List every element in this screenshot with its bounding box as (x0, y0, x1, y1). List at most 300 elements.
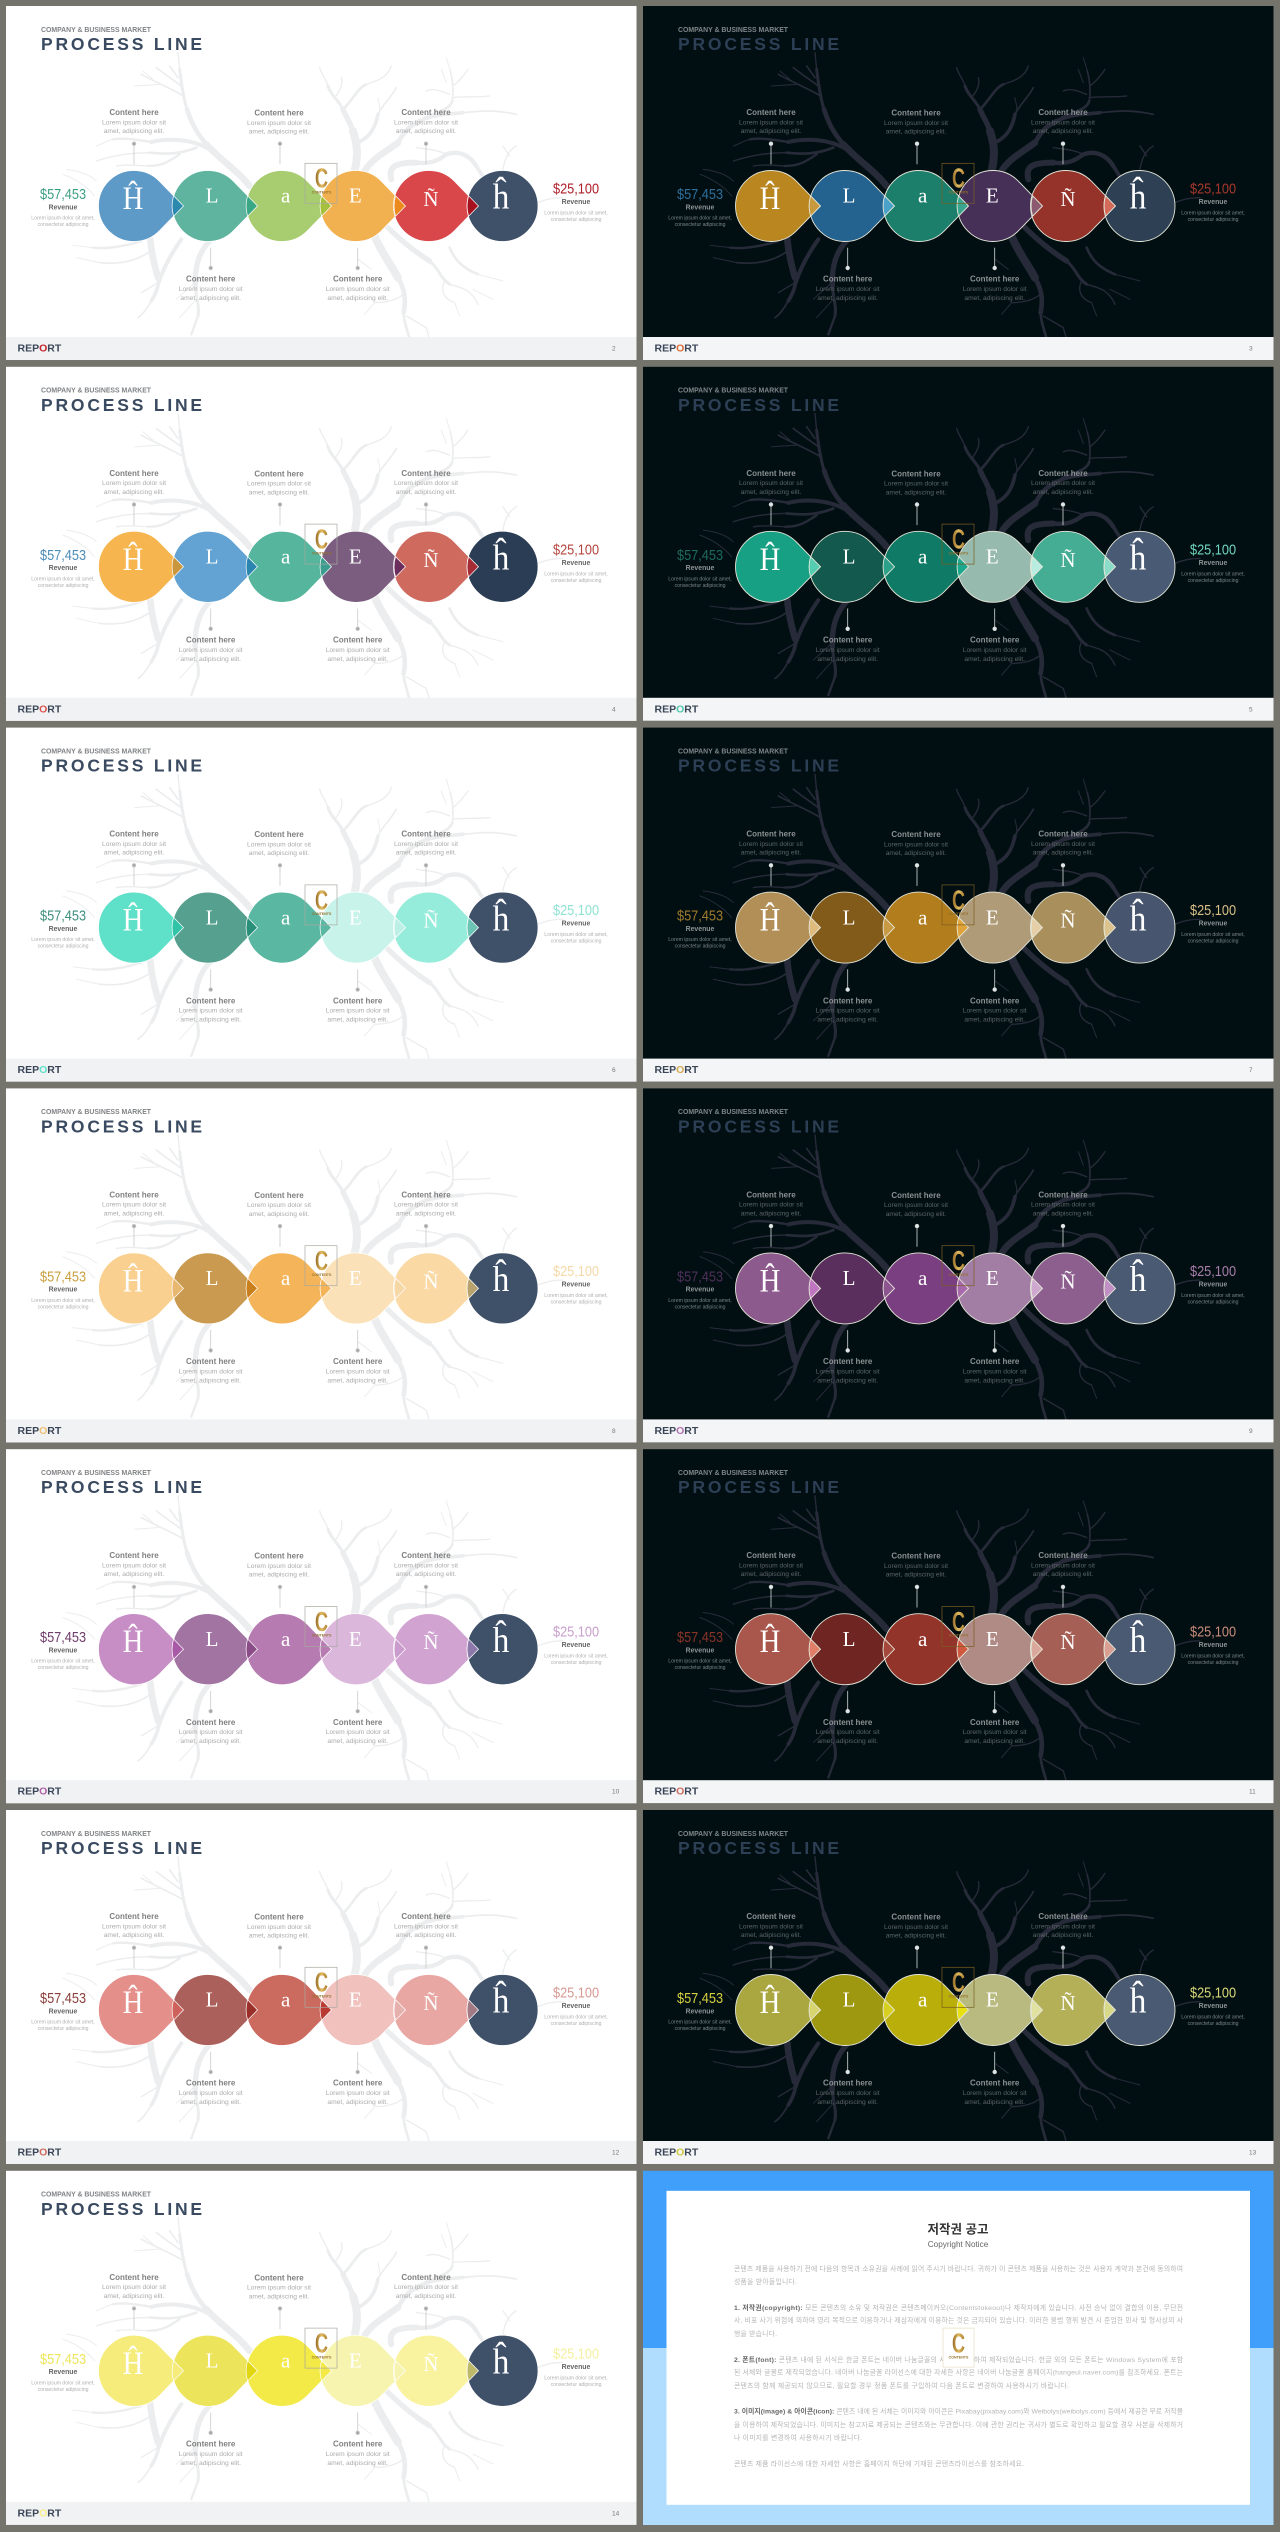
revenue left: Revenue (49, 926, 78, 933)
callout bottom 1: Content here (823, 2079, 873, 2088)
callout top 1: Content here (746, 108, 796, 117)
logo (943, 2328, 974, 2367)
revenue left: Lorem ipsum dolor sit amet, (31, 2020, 95, 2026)
heading: PROCESS LINE (678, 756, 842, 776)
tree illustration (700, 774, 1200, 1061)
callout top 1 (102, 1551, 166, 1608)
revenue left: consectetur adipiscing (675, 944, 726, 950)
chain letters: Ñ (423, 548, 439, 572)
callout top 2: Lorem ipsum dolor sit (247, 120, 311, 127)
revenue left (31, 1267, 95, 1310)
revenue left: $57,453 (40, 1267, 86, 1285)
logo: C (952, 1245, 965, 1276)
revenue right: consectetur adipiscing (551, 578, 602, 584)
logo: CONTENTS (312, 551, 332, 555)
callout top 1 (102, 2273, 166, 2329)
revenue left: $57,453 (40, 546, 86, 563)
chain letters (760, 1619, 1146, 1660)
callout top 2: Lorem ipsum dolor sit (884, 1202, 948, 1209)
footer bar (6, 698, 636, 721)
heading: PROCESS LINE (678, 1116, 842, 1136)
heading: PROCESS LINE (41, 34, 205, 54)
chain letters: L (843, 1627, 855, 1651)
chain letters: Ñ (423, 909, 439, 933)
callout top 2: amet, adipiscing elit. (249, 1932, 309, 1940)
revenue left: Revenue (686, 204, 715, 211)
chain letters: Ĥ (123, 901, 143, 938)
callout top 3: Content here (1038, 469, 1088, 478)
callout bottom 1: Lorem ipsum dolor sit (816, 2090, 880, 2097)
logo: C (315, 1606, 328, 1637)
callout top 1: Content here (109, 469, 159, 478)
revenue right (1181, 540, 1245, 584)
callout bottom 1: Content here (186, 275, 236, 284)
chain letters: L (206, 2349, 218, 2373)
revenue left: consectetur adipiscing (675, 2026, 726, 2032)
revenue left: Revenue (686, 2008, 715, 2015)
callout bottom 1 (179, 2412, 243, 2467)
callout top 3 (394, 1190, 458, 1247)
callout top 1 (102, 830, 166, 886)
callout top 3 (1031, 830, 1095, 886)
notice body text: 나 이미지를 변경하여 사용하시기 바랍니다. (734, 2433, 862, 2442)
callout top 3: Content here (401, 2273, 451, 2282)
chain letters: ĥ (1130, 536, 1146, 578)
tree illustration (700, 413, 1200, 700)
page number: 8 (612, 1428, 616, 1435)
page number: 4 (612, 706, 616, 713)
logo: C (952, 884, 965, 915)
process chain (735, 1614, 1175, 1685)
callout bottom 1: Lorem ipsum dolor sit (816, 1008, 880, 1015)
callout top 3: Lorem ipsum dolor sit (1031, 1202, 1095, 1209)
revenue right: consectetur adipiscing (1188, 217, 1239, 223)
revenue left: Lorem ipsum dolor sit amet, (668, 937, 732, 943)
process chain (98, 1974, 538, 2046)
slide 4: light process line (6, 367, 636, 721)
footer label: REPORT (18, 2146, 62, 2158)
revenue right: Revenue (1199, 1281, 1228, 1288)
callout top 3: Lorem ipsum dolor sit (1031, 1562, 1095, 1569)
heading: PROCESS LINE (41, 1477, 205, 1497)
revenue right: Lorem ipsum dolor sit amet, (544, 210, 608, 216)
callout bottom 2: amet, adipiscing elit. (327, 1017, 388, 1024)
revenue right: Revenue (562, 1642, 591, 1649)
revenue right: $25,100 (553, 540, 599, 558)
callout top 3: Lorem ipsum dolor sit (1031, 480, 1095, 487)
heading: COMPANY & BUSINESS MARKET (678, 1831, 789, 1838)
logo: C (315, 884, 328, 915)
callout bottom 1: amet, adipiscing elit. (817, 1738, 878, 1745)
callout top 3: amet, adipiscing elit. (1033, 489, 1093, 496)
revenue right: consectetur adipiscing (551, 1299, 602, 1305)
callout top 3: amet, adipiscing elit. (396, 850, 456, 857)
chain letters: L (206, 544, 218, 568)
chain letters: L (206, 1627, 218, 1651)
callout top 3: Content here (401, 1551, 451, 1560)
process chain (98, 531, 538, 602)
callout bottom 2: Lorem ipsum dolor sit (963, 2090, 1027, 2097)
footer bar (6, 1419, 636, 1442)
revenue right: consectetur adipiscing (551, 939, 602, 945)
revenue left (31, 546, 95, 589)
footer label: REPORT (654, 1786, 699, 1798)
heading: COMPANY & BUSINESS MARKET (678, 27, 789, 34)
footer bar (643, 698, 1274, 721)
logo (942, 884, 974, 925)
callout top 1: Content here (109, 830, 159, 839)
callout top 2 (247, 1552, 311, 1608)
slide 9: dark process line (643, 1088, 1274, 1442)
revenue right: Lorem ipsum dolor sit amet, (544, 2375, 608, 2381)
chain letters: Ñ (423, 2352, 439, 2376)
revenue right (544, 2344, 608, 2388)
chain letters: ĥ (493, 2340, 509, 2382)
callout bottom 1: Lorem ipsum dolor sit (179, 286, 243, 293)
revenue right: $25,100 (1190, 540, 1236, 558)
chain letters (760, 536, 1146, 578)
revenue right (544, 1983, 608, 2027)
callout top 2: Lorem ipsum dolor sit (247, 481, 311, 488)
logo: C (952, 523, 965, 554)
footer label: REPORT (654, 2146, 699, 2158)
revenue right: consectetur adipiscing (1188, 939, 1239, 945)
revenue right: Revenue (562, 2364, 591, 2371)
callout top 2 (884, 1912, 948, 1968)
revenue right: $25,100 (553, 901, 599, 918)
footer label: REPORT (654, 703, 699, 715)
slide 11: dark process line (643, 1449, 1274, 1803)
revenue left: consectetur adipiscing (38, 222, 89, 228)
callout top 1: Content here (109, 108, 159, 117)
revenue left (31, 1989, 95, 2032)
process chain (98, 1253, 538, 1324)
callout top 2: Content here (254, 1191, 304, 1200)
chain letters: Ñ (423, 1630, 439, 1654)
chain letters: L (843, 544, 855, 568)
callout bottom 2: Lorem ipsum dolor sit (326, 1368, 390, 1375)
revenue left: Revenue (686, 1647, 715, 1654)
callout bottom 2: Content here (333, 1357, 383, 1366)
chain letters: a (281, 544, 291, 568)
chain letters: a (281, 2349, 291, 2373)
callout bottom 1: Lorem ipsum dolor sit (816, 286, 880, 293)
revenue left: Lorem ipsum dolor sit amet, (668, 1298, 732, 1304)
callout top 3 (394, 469, 458, 525)
revenue left: $57,453 (40, 1989, 86, 2006)
slide 7: dark process line (643, 728, 1274, 1082)
callout top 1: Content here (746, 1551, 796, 1560)
callout top 2 (247, 469, 311, 525)
notice body text: 1. 저작권(copyright): 모든 콘텐츠의 소유 및 저작권은 콘텐츠메이커오(Contentstokeout)나 제작자에게 있습니다. 사전 승낙 없이 결합의 이용, 무단전 (734, 2303, 1183, 2312)
chain letters: Ĥ (760, 540, 780, 577)
callout top 3 (1031, 108, 1095, 164)
revenue left: $57,453 (677, 1989, 723, 2006)
callout top 2: amet, adipiscing elit. (249, 850, 309, 857)
revenue left: consectetur adipiscing (38, 2387, 89, 2393)
logo (942, 1245, 974, 1286)
process chain (735, 531, 1175, 602)
logo: C (315, 1245, 328, 1276)
callout bottom 1: Lorem ipsum dolor sit (179, 2090, 243, 2097)
callout bottom 1: Content here (186, 1718, 236, 1727)
revenue left: consectetur adipiscing (38, 583, 89, 589)
white notice panel (666, 2191, 1250, 2505)
callout top 3: Lorem ipsum dolor sit (394, 1202, 458, 1209)
logo: CONTENTS (312, 1994, 332, 1998)
notice body text: 사, 비표 사기 위험에 의하여 영리 목적으로 이용하거나 제삼자에게 이용하는 것은 금지되어 있습니다. 이러한 불법 행위 발견 시 준엄한 민사 및 형사상의 사 (734, 2316, 1184, 2325)
slide 5: dark process line (643, 367, 1274, 721)
callout bottom 2: Content here (333, 2440, 383, 2449)
callout top 2: Content here (254, 830, 304, 839)
footer label: REPORT (18, 342, 62, 354)
heading: PROCESS LINE (678, 34, 842, 54)
logo: CONTENTS (312, 2355, 332, 2359)
callout top 1: Lorem ipsum dolor sit (739, 480, 803, 487)
callout top 2: Lorem ipsum dolor sit (884, 1924, 948, 1931)
revenue left: consectetur adipiscing (675, 1665, 726, 1671)
notice body text: 콘텐츠 제품 라이선스에 대한 자세한 사항은 홈페이지 하단에 기재된 콘텐츠라이선스를 참조하세요. (734, 2459, 1024, 2468)
heading: COMPANY & BUSINESS MARKET (41, 27, 152, 34)
callout bottom 2 (963, 608, 1027, 663)
heading: PROCESS LINE (678, 395, 842, 415)
chain letters: L (206, 905, 218, 929)
revenue right: consectetur adipiscing (1188, 1660, 1239, 1666)
callout top 2: Content here (891, 108, 941, 118)
chain letters (760, 1258, 1146, 1299)
callout top 3: Lorem ipsum dolor sit (1031, 841, 1095, 848)
revenue left: Lorem ipsum dolor sit amet, (31, 2380, 95, 2386)
callout bottom 1 (179, 1330, 243, 1384)
callout top 1 (739, 1190, 803, 1247)
callout top 1: amet, adipiscing elit. (104, 128, 164, 135)
callout top 2 (247, 108, 311, 164)
callout bottom 1: Lorem ipsum dolor sit (179, 647, 243, 654)
callout bottom 1 (816, 1330, 880, 1384)
logo: CONTENTS (312, 1634, 332, 1638)
revenue left: consectetur adipiscing (38, 1304, 89, 1310)
revenue right: $25,100 (1190, 1983, 1236, 2001)
callout top 3: amet, adipiscing elit. (1033, 1571, 1093, 1578)
notice body text: 성품을 받아들입니다. (734, 2277, 797, 2286)
revenue left (668, 1989, 732, 2032)
revenue right: $25,100 (553, 1262, 599, 1279)
callout top 2: Content here (254, 108, 304, 118)
revenue left: Revenue (49, 1287, 78, 1294)
callout bottom 1 (179, 248, 243, 302)
callout bottom 2: Content here (970, 636, 1020, 644)
tree illustration (700, 1857, 1200, 2143)
slide 10: light process line (6, 1449, 636, 1803)
footer bar (643, 1419, 1274, 1442)
heading: COMPANY & BUSINESS MARKET (41, 1831, 152, 1838)
callout bottom 1 (816, 969, 880, 1024)
callout top 2: Lorem ipsum dolor sit (884, 120, 948, 127)
chain letters: Ñ (1060, 1269, 1076, 1293)
chain letters: Ĥ (123, 1262, 143, 1299)
notice body text: 콘텐츠의 함께 제공되지 않으므로, 필요할 경우 정품 폰트를 구입하여 다음 폰트로 변경하여 사용하시기 바랍니다. (734, 2381, 1069, 2390)
callout top 1: Content here (746, 469, 796, 478)
page number: 3 (1249, 346, 1253, 352)
callout bottom 2: Lorem ipsum dolor sit (326, 2451, 390, 2458)
callout top 2: amet, adipiscing elit. (249, 1572, 309, 1579)
callout top 1: Lorem ipsum dolor sit (739, 1923, 803, 1930)
callout top 1: amet, adipiscing elit. (741, 850, 801, 857)
callout top 2: amet, adipiscing elit. (249, 2293, 309, 2300)
callout bottom 2: Lorem ipsum dolor sit (963, 286, 1027, 293)
callout top 3: amet, adipiscing elit. (1033, 1210, 1093, 1217)
chain letters: Ĥ (123, 1983, 143, 2020)
callout top 2: amet, adipiscing elit. (886, 850, 946, 857)
callout top 2: Lorem ipsum dolor sit (247, 1924, 311, 1931)
callout top 1: amet, adipiscing elit. (741, 1932, 801, 1939)
callout top 3: Lorem ipsum dolor sit (394, 841, 458, 848)
chain letters: a (918, 1266, 928, 1290)
footer label: REPORT (18, 703, 62, 715)
callout top 2: Lorem ipsum dolor sit (247, 841, 311, 848)
callout top 2: amet, adipiscing elit. (886, 489, 946, 496)
slide 3: dark process line (643, 6, 1274, 360)
footer label: REPORT (654, 1425, 699, 1437)
callout bottom 2: amet, adipiscing elit. (327, 2460, 388, 2467)
revenue right: Revenue (1199, 199, 1228, 206)
notice body text (734, 2264, 1184, 2468)
revenue right: consectetur adipiscing (551, 217, 602, 223)
chain letters (123, 536, 509, 578)
revenue right (1181, 901, 1245, 945)
callout bottom 2: amet, adipiscing elit. (327, 295, 388, 302)
revenue right: Lorem ipsum dolor sit amet, (544, 2014, 608, 2020)
slide background (643, 1088, 1274, 1442)
revenue left: Revenue (49, 1647, 78, 1654)
slide background (643, 1810, 1274, 2164)
callout top 1: Lorem ipsum dolor sit (102, 841, 166, 848)
chain letters: a (918, 1627, 928, 1651)
chain letters: L (843, 1988, 855, 2012)
callout bottom 2: amet, adipiscing elit. (964, 295, 1025, 302)
revenue left: $57,453 (40, 907, 86, 924)
callout top 1: Content here (746, 830, 796, 839)
chain letters: E (986, 184, 999, 208)
tree illustration (700, 53, 1200, 339)
chain letters: L (206, 1266, 218, 1290)
logo: CONTENTS (949, 1634, 969, 1638)
callout top 2: Lorem ipsum dolor sit (247, 1202, 311, 1209)
chain letters (123, 2340, 509, 2382)
chain letters: ĥ (1130, 897, 1146, 939)
tree illustration (63, 1496, 563, 1782)
process chain (735, 1253, 1175, 1324)
chain letters: a (918, 184, 928, 208)
callout top 2 (247, 2273, 311, 2329)
callout bottom 1 (179, 2052, 243, 2106)
callout top 2 (884, 469, 948, 525)
slide background (643, 728, 1274, 1082)
callout top 2: Content here (891, 1912, 941, 1922)
pale blue bottom band (643, 2348, 1274, 2525)
callout bottom 1: Content here (823, 1718, 873, 1727)
logo: C (315, 523, 328, 554)
chain letters: Ĥ (760, 1983, 780, 2020)
revenue right: Lorem ipsum dolor sit amet, (544, 1293, 608, 1299)
chain letters: L (843, 184, 855, 208)
revenue right: Lorem ipsum dolor sit amet, (544, 571, 608, 577)
tree illustration (63, 413, 563, 700)
chain letters: E (986, 905, 999, 929)
footer label: REPORT (18, 1425, 62, 1437)
chain letters: L (843, 1266, 855, 1290)
callout top 2: Lorem ipsum dolor sit (247, 1563, 311, 1570)
chain letters: E (349, 1988, 362, 2012)
callout bottom 2 (326, 1330, 390, 1384)
callout top 2: Content here (254, 1912, 304, 1922)
callout top 1: Lorem ipsum dolor sit (102, 1562, 166, 1569)
revenue left: Revenue (49, 2369, 78, 2376)
callout bottom 1: amet, adipiscing elit. (180, 2460, 241, 2467)
callout top 1: Lorem ipsum dolor sit (102, 2284, 166, 2291)
heading: COMPANY & BUSINESS MARKET (678, 388, 789, 395)
revenue left: Revenue (686, 565, 715, 572)
callout top 1: Lorem ipsum dolor sit (102, 119, 166, 126)
callout top 2 (884, 1552, 948, 1608)
blue top band (643, 2171, 1274, 2348)
callout top 1: Lorem ipsum dolor sit (739, 1202, 803, 1209)
chain letters (123, 897, 509, 939)
revenue left: $57,453 (40, 2350, 86, 2367)
chain letters: E (349, 544, 362, 568)
chain letters: E (986, 1988, 999, 2012)
callout bottom 2: amet, adipiscing elit. (964, 1017, 1025, 1024)
callout top 1: amet, adipiscing elit. (104, 2293, 164, 2300)
callout bottom 2 (326, 608, 390, 663)
revenue left: Lorem ipsum dolor sit amet, (31, 1298, 95, 1304)
callout bottom 2 (963, 2052, 1027, 2106)
logo (305, 1245, 337, 1286)
callout top 1: amet, adipiscing elit. (104, 1571, 164, 1578)
revenue left (668, 1267, 732, 1310)
slide 13: dark process line (643, 1810, 1274, 2164)
chain letters: Ñ (1060, 909, 1076, 933)
revenue left: consectetur adipiscing (38, 2026, 89, 2032)
process chain (98, 2335, 538, 2406)
callout top 1: amet, adipiscing elit. (104, 850, 164, 857)
callout bottom 1: Content here (823, 275, 873, 284)
callout bottom 1: amet, adipiscing elit. (180, 1377, 241, 1384)
callout top 3: Lorem ipsum dolor sit (394, 1923, 458, 1930)
chain letters: a (281, 1988, 291, 2012)
revenue right (1181, 1983, 1245, 2027)
callout bottom 2 (963, 969, 1027, 1024)
callout top 3: Content here (1038, 830, 1088, 839)
process chain (98, 1614, 538, 1685)
callout top 3: Content here (1038, 1551, 1088, 1560)
slide background (6, 2171, 636, 2525)
chain letters: Ĥ (760, 1262, 780, 1299)
chain letters: Ĥ (123, 179, 143, 216)
tree illustration (63, 53, 563, 339)
heading: COMPANY & BUSINESS MARKET (678, 748, 789, 755)
chain letters: ĥ (493, 536, 509, 578)
revenue right: Revenue (562, 560, 591, 567)
logo: CONTENTS (312, 1273, 332, 1277)
logo: C (952, 163, 965, 194)
footer label: REPORT (654, 1064, 699, 1076)
logo (305, 2328, 337, 2368)
revenue right: Revenue (1199, 560, 1228, 567)
process chain (98, 892, 538, 963)
logo: C (952, 1967, 965, 1998)
notice title: 저작권 공고 (928, 2222, 988, 2237)
